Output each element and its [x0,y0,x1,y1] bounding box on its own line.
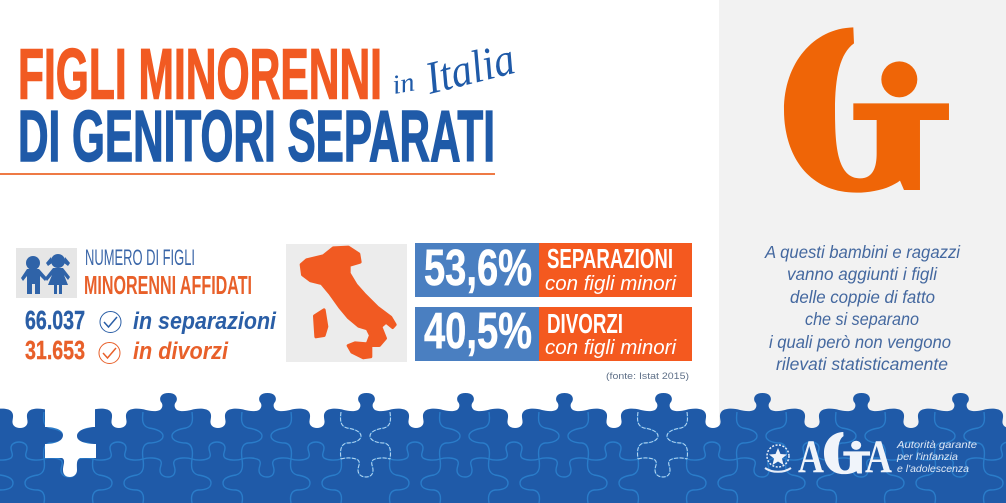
label: separazioni: SEPARAZIONI [547,243,673,274]
missing puzzle piece [45,390,96,477]
text block: side note: i quali però non vengono [769,332,951,352]
sublabel: con figli minori [545,273,677,295]
text block: side note: vanno aggiunti i figli [787,264,938,284]
stat: 66.037: 66.037 [25,305,85,335]
icon: check blue [100,312,121,332]
panel: map of Italy [286,244,407,362]
heading: minorenni affidati: MINORENNI AFFIDATI [84,270,252,300]
logo: AGIA [765,431,977,483]
sublabel: con figli minori [545,337,677,359]
panel: right grey background [719,0,1006,430]
panel: separazioni bar [415,239,692,297]
icon: check orange [99,342,120,364]
text block: side note: che si separano [805,309,919,329]
label: in separazioni: in separazioni [133,308,277,335]
source note: (fonte: Istat 2015) [606,371,689,382]
logo letter A: A [865,431,892,483]
title [18,32,520,177]
label: divorzi: DIVORZI [547,308,623,339]
icon: Gi logo [784,27,949,193]
logo caption: e l'adolescenza [897,463,969,475]
text block: side note: A questi bambini e ragazzi [764,242,961,262]
icon: two children holding hands [16,248,77,298]
script subtitle: in [390,67,417,100]
stat: 53,6%: 53,6% [424,239,532,296]
logo caption: per l'infanzia [896,451,958,463]
logo caption [896,439,977,475]
stat: 31.653: 31.653 [25,335,85,365]
label: in divorzi: in divorzi [133,338,229,365]
icon: emblem [765,445,791,472]
title line 2: DI GENITORI SEPARATI [18,97,495,177]
title line 1: FIGLI MINORENNI [18,36,382,114]
puzzle band [0,390,1006,503]
script subtitle: Italia [419,32,520,104]
text block: side note [764,242,961,374]
logo caption: Autorità garante [896,439,977,451]
text block: side note: delle coppie di fatto [790,287,935,307]
panel: divorzi bar [415,302,692,361]
script subtitle [390,32,520,104]
heading: numero di figli: NUMERO DI FIGLI [85,245,195,270]
text block: side note: rilevati statisticamente [776,354,948,374]
panel: children count [16,245,277,365]
logo letter A: A [798,431,824,483]
title underline [0,173,495,175]
logo Gi mark [824,432,870,474]
stat: 40,5%: 40,5% [424,302,532,359]
